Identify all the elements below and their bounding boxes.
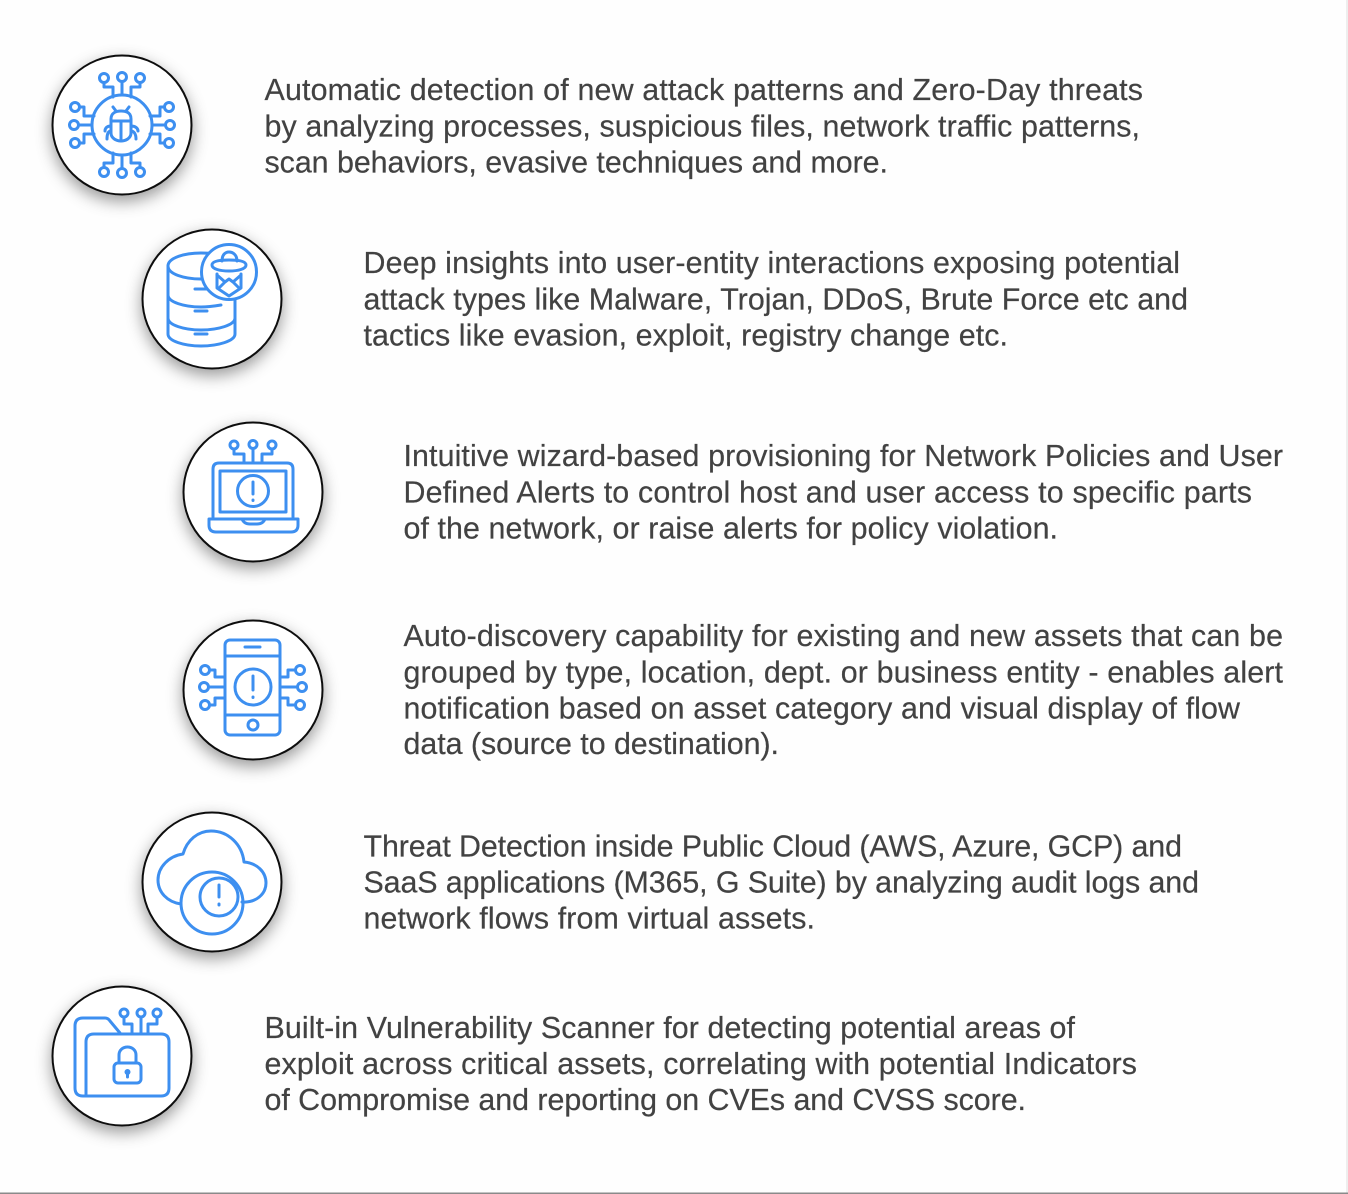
text: user-entity description: attack types like Malware, Trojan, DDoS, Brute Force etc and — [364, 282, 1188, 316]
text: provisioning description: Intuitive wizard-based provisioning for Network Policies and User — [404, 439, 1283, 473]
panel: vulnerability scanner — [52, 986, 1137, 1126]
text: auto-discovery description: Auto-discovery capability for existing and new assets that can be — [404, 619, 1283, 653]
text: automatic detection description: by analyzing processes, suspicious files, network traffic patterns, — [264, 110, 1140, 144]
text: vulnerability scanner description: exploit across critical assets, correlating with potential Indicators — [264, 1047, 1137, 1081]
panel: automatic threat detection — [52, 56, 1143, 194]
panel: public cloud threat detection — [142, 812, 1199, 952]
panel: wizard-based provisioning — [184, 422, 1283, 562]
icon: smartphone with alert and circuits — [184, 620, 322, 760]
text: auto-discovery description: notification based on asset category and visual display of flow — [404, 692, 1241, 726]
text: vulnerability scanner description: of Compromise and reporting on CVEs and CVSS score. — [264, 1083, 1026, 1117]
text: auto-discovery description: grouped by type, location, dept. or business entity - enables alert — [404, 656, 1284, 690]
panel: user-entity insights — [142, 230, 1188, 368]
text: automatic detection description: Automatic detection of new attack patterns and Zero-Day threats — [264, 73, 1143, 107]
icon: database with spy badge — [142, 230, 282, 368]
icon: laptop with alert — [184, 422, 322, 562]
icon: bug with circuit nodes — [52, 56, 192, 194]
text: automatic detection description: scan behaviors, evasive techniques and more. — [264, 146, 888, 180]
icon: folder with lock and circuits — [52, 986, 192, 1126]
text: public cloud description: Threat Detection inside Public Cloud (AWS, Azure, GCP) and — [364, 830, 1182, 864]
text: public cloud description: network flows from virtual assets. — [364, 902, 815, 936]
text: user-entity description: Deep insights into user-entity interactions exposing potential — [364, 246, 1180, 280]
icon: cloud with alert — [142, 812, 282, 952]
text: provisioning description: Defined Alerts to control host and user access to specific parts — [404, 476, 1252, 510]
text: vulnerability scanner description: Built-in Vulnerability Scanner for detecting potential areas of — [264, 1011, 1076, 1045]
text: user-entity description: tactics like evasion, exploit, registry change etc. — [364, 318, 1008, 352]
text: auto-discovery description: data (source to destination). — [404, 727, 779, 761]
panel: asset auto-discovery — [184, 619, 1284, 761]
text: provisioning description: of the network, or raise alerts for policy violation. — [404, 512, 1058, 546]
text: public cloud description: SaaS applications (M365, G Suite) by analyzing audit logs and — [364, 866, 1199, 900]
